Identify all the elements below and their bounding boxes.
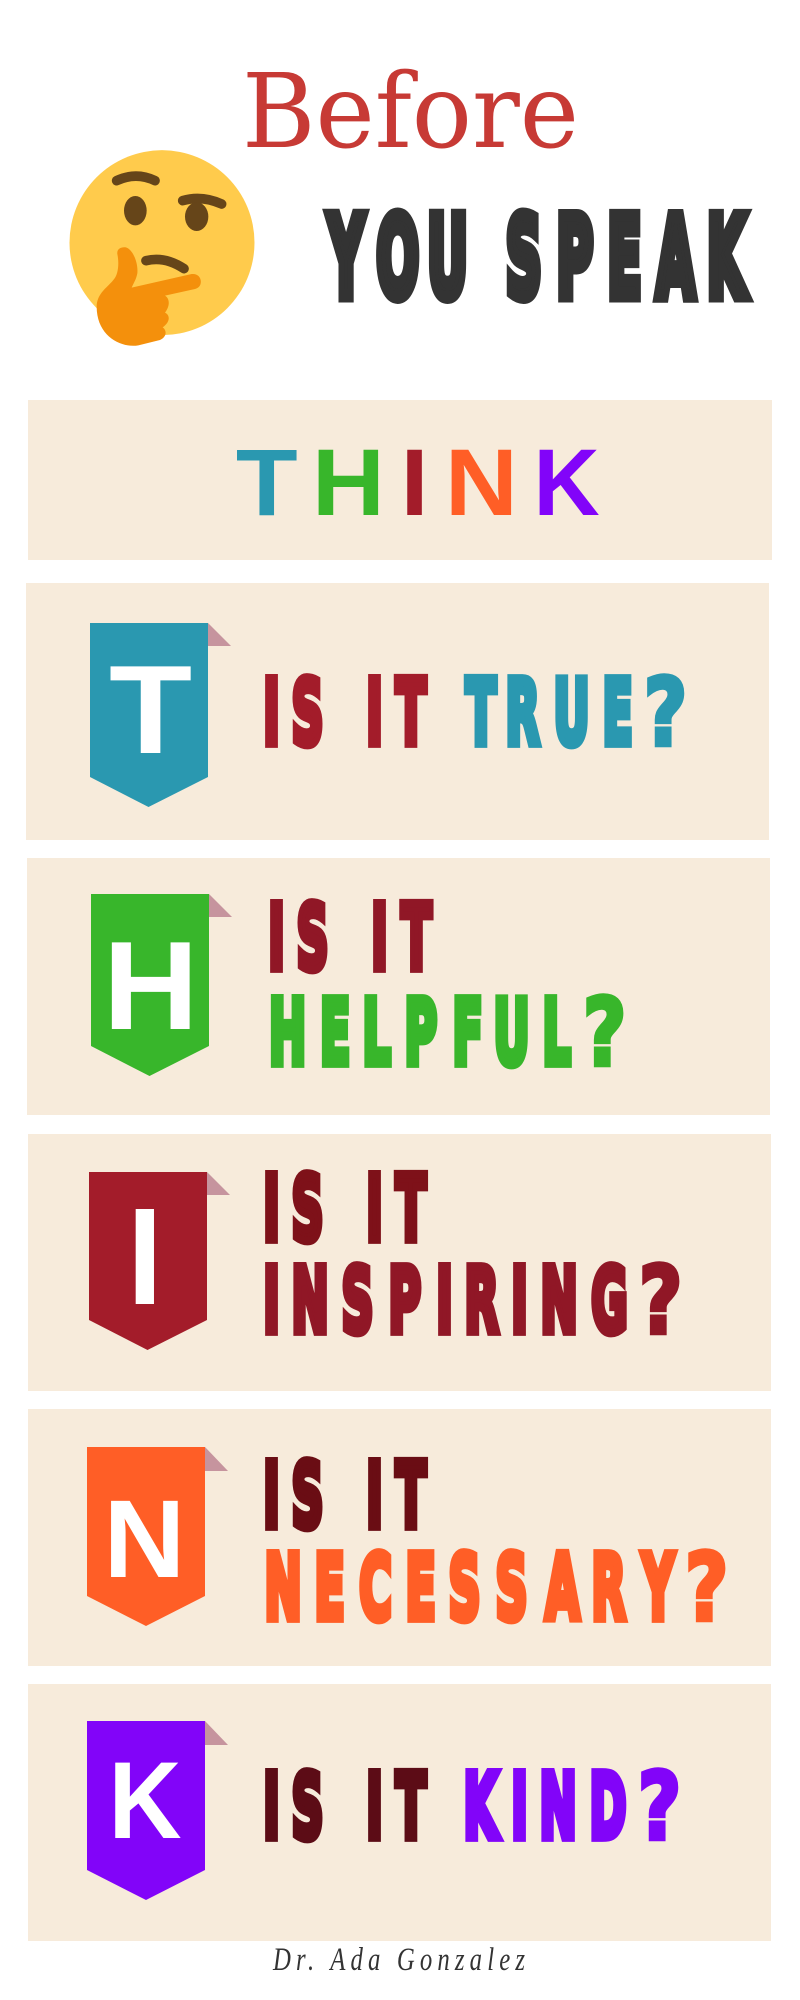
text: is it inspiring: ? <box>639 1247 682 1356</box>
text: is it helpful <box>268 886 626 1088</box>
text: is it kind: IS IT <box>263 1755 426 1859</box>
panel: K is it kind <box>28 1684 771 1941</box>
text: is it kind <box>263 1753 681 1862</box>
footer: author credit: Dr. Ada Gonzalez <box>272 1942 525 1978</box>
text: is it necessary: NECESSARY <box>264 1536 675 1640</box>
text: is it kind: ? <box>638 1753 681 1862</box>
text: is it inspiring: INSPIRING <box>263 1249 628 1353</box>
text: is it helpful: ? <box>583 979 626 1088</box>
text: is it true: TRUE <box>466 661 633 765</box>
text: is it necessary <box>263 1444 728 1643</box>
title: YOU SPEAK: YOU SPEAK <box>327 194 748 323</box>
text: is it necessary: ? <box>685 1534 728 1643</box>
heading: THINK acronym: K <box>534 430 600 535</box>
text: is it inspiring: IS IT <box>263 1157 426 1261</box>
panel: T is it true <box>26 583 769 840</box>
icon: N bookmark: N <box>104 1478 185 1601</box>
text: is it inspiring <box>263 1157 682 1356</box>
icon: I bookmark: I <box>127 1180 162 1334</box>
heading: THINK acronym <box>236 429 600 535</box>
text: is it helpful: HELPFUL <box>269 981 571 1085</box>
text: is it kind: KIND <box>464 1755 626 1859</box>
text: is it helpful: IS IT <box>268 886 432 990</box>
heading: THINK acronym: N <box>445 429 518 535</box>
icon: T bookmark: T <box>109 639 192 780</box>
panel: THINK <box>28 400 772 560</box>
icon: T bookmark <box>90 623 231 807</box>
icon: N bookmark <box>87 1447 228 1626</box>
title: Before: Before <box>242 52 579 172</box>
panel: I is it inspiring <box>28 1134 771 1391</box>
icon: thinking face emoji <box>69 150 254 346</box>
text: is it true: ? <box>644 659 687 768</box>
icon: K bookmark: K <box>108 1739 182 1862</box>
heading: THINK acronym: T <box>236 429 298 535</box>
heading: THINK acronym: I <box>401 429 429 535</box>
icon: K bookmark <box>87 1721 228 1900</box>
panel: N is it necessary <box>28 1409 771 1666</box>
icon: H bookmark: H <box>103 916 199 1056</box>
text: is it true: IS IT <box>263 661 426 765</box>
text: is it true <box>263 659 687 768</box>
icon: H bookmark <box>91 894 232 1076</box>
heading: THINK acronym: H <box>312 429 385 535</box>
text: is it necessary: IS IT <box>263 1444 426 1548</box>
icon: I bookmark <box>89 1172 230 1350</box>
panel: H is it helpful <box>27 858 770 1115</box>
